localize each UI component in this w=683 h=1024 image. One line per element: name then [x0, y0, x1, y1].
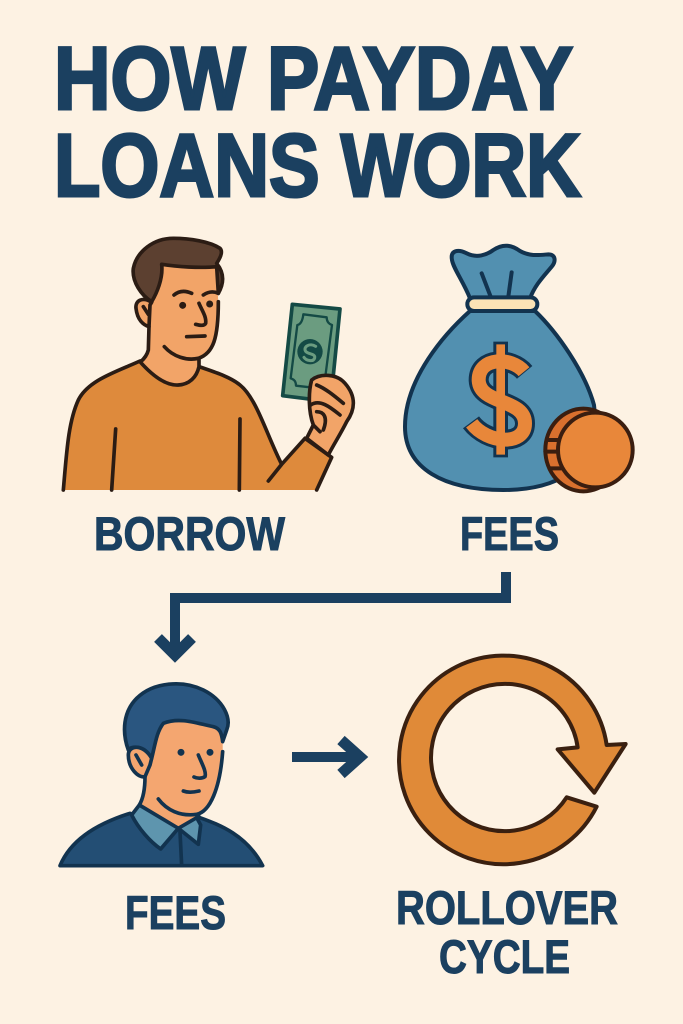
neck and face	[140, 265, 218, 385]
hand	[307, 375, 353, 455]
shirt	[60, 813, 263, 866]
label: rollover cycle: ROLLOVER	[396, 881, 618, 934]
icon: man portrait	[60, 684, 263, 866]
label: rollover cycle	[396, 881, 618, 983]
bag body	[405, 311, 595, 490]
label: fees (top): FEES	[460, 507, 559, 560]
icon: man holding a banknote	[63, 238, 353, 490]
hair	[125, 684, 228, 758]
icon: money bag with coin	[405, 246, 633, 491]
title: HOW PAYDAY	[54, 28, 573, 128]
ear	[136, 300, 152, 327]
bag tie	[467, 297, 537, 311]
arrow: person to rollover	[292, 740, 360, 774]
coin	[545, 409, 633, 491]
neck and face	[139, 720, 223, 828]
title: LOANS WORK	[54, 115, 581, 215]
bag folds	[482, 272, 512, 297]
label: fees (bottom): FEES	[125, 886, 226, 939]
label: borrow: BORROW	[94, 507, 286, 560]
ear	[128, 747, 152, 777]
icon: rollover cycle arrow	[399, 656, 626, 864]
collar	[132, 805, 201, 866]
facial features	[179, 751, 212, 792]
bag neck	[452, 246, 555, 298]
facial features	[174, 291, 218, 337]
banknote	[283, 304, 340, 402]
label: rollover cycle: CYCLE	[439, 930, 570, 983]
arrow: fees to person	[158, 572, 506, 655]
title	[54, 28, 581, 215]
sweater	[63, 361, 332, 490]
dollar sign	[471, 342, 525, 457]
hair	[133, 238, 223, 302]
